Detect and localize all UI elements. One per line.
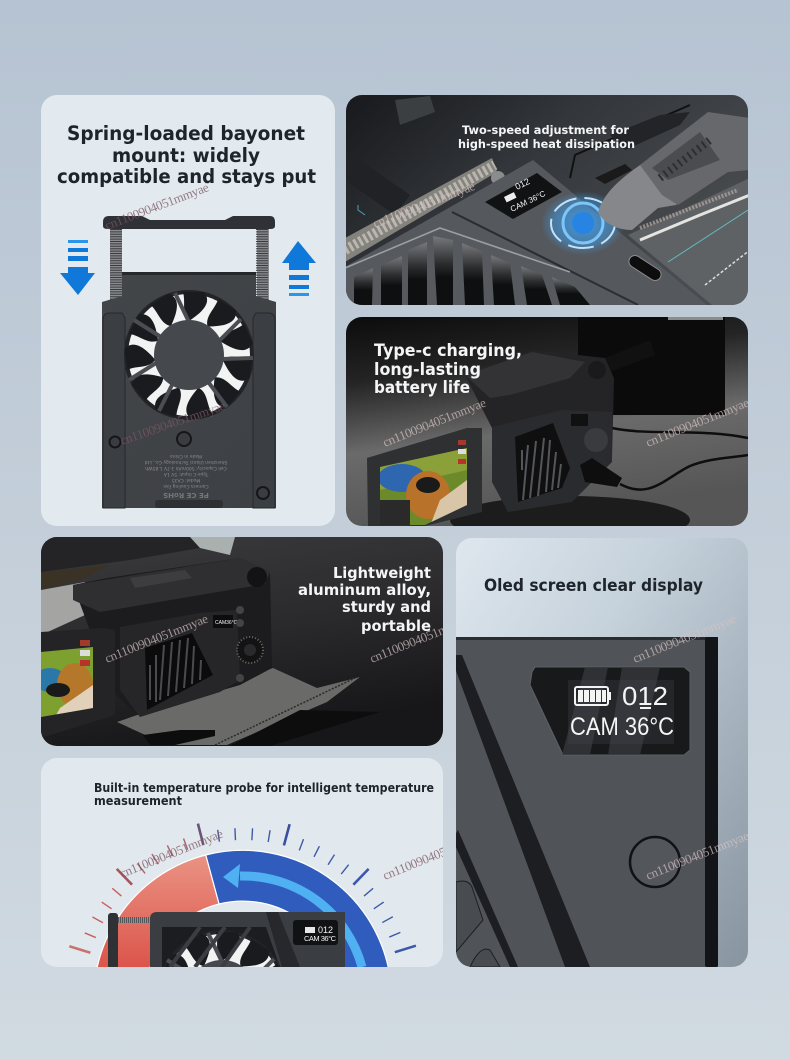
icon: up arrow: [282, 241, 316, 296]
caption: lightweight aluminum: sturdy and: [342, 598, 431, 616]
OLED display: [530, 667, 690, 755]
dark floor shadow: [450, 496, 690, 526]
USB-C port: [628, 255, 662, 281]
heading: OLED: Oled screen clear display: [484, 576, 703, 596]
heading: spring-loaded mount: compatible and stays put: [57, 165, 316, 188]
device close-up: [455, 637, 718, 967]
rating label, upside down: Type-C Input: 5V 1A: [163, 471, 209, 477]
charger box: [578, 315, 725, 415]
caption: lightweight aluminum: Lightweight: [333, 564, 432, 582]
finger: [598, 112, 750, 230]
watermark: cn1100904051mmyae: [103, 611, 210, 666]
rating label, upside down: Camera Cooling Fan: [163, 483, 209, 489]
heading: spring-loaded mount: [57, 122, 316, 188]
hot-shoe accessory: [143, 730, 215, 745]
heading: temperature probe: measurement: [94, 794, 182, 808]
panel: OLED screen: [455, 538, 751, 967]
panel: two-speed adjustment: [345, 95, 750, 305]
top clamp bar: [103, 216, 275, 229]
rating label, upside down: Made in China: [170, 453, 202, 459]
camera body: [465, 350, 614, 458]
camera dial: [236, 606, 263, 682]
heading: temperature probe: [94, 781, 434, 808]
spring rods: [110, 229, 269, 300]
watermark: cn1100904051mmyae: [381, 828, 488, 883]
caption: lightweight aluminum: portable: [361, 617, 431, 635]
caption: lightweight aluminum: [298, 564, 432, 635]
vent slots: [354, 236, 590, 305]
rating label, upside down: Cell Capacity: 500mAh 3.7V 1.85Wh: [145, 465, 227, 471]
watermark: cn1100904051mmyae: [644, 395, 751, 450]
gauge ring: blue segment: [206, 850, 392, 999]
panel: lightweight aluminum alloy: [34, 537, 475, 746]
rating label, upside down: PE CE RoHS: [163, 491, 209, 499]
watermark: cn1100904051mmyae: [381, 395, 488, 450]
heading: spring-loaded mount: mount: widely: [112, 144, 260, 167]
screws: [110, 432, 269, 499]
cooler attached: CAM36°C: [215, 620, 238, 626]
caption: two-speed adjustment: high-speed heat dissipation: [458, 137, 635, 151]
watermark: cn1100904051mmyae: [368, 611, 475, 666]
heading: temperature probe: Built-in temperature probe for intelligent temperature: [94, 781, 434, 795]
watermark: cn1100904051mmyae: [118, 826, 225, 881]
charging cables: [612, 428, 748, 490]
OLED display: [485, 173, 562, 219]
circuit board left: [345, 96, 505, 262]
panel: Type-C charging: [346, 315, 751, 544]
flip screen: [34, 628, 115, 738]
flip screen: [367, 428, 482, 530]
cooler device: [108, 912, 345, 1060]
gauge ring: red segment: [94, 855, 219, 999]
watermark: cn1100904051mmyae: [631, 611, 738, 666]
dotted chip strip: [640, 190, 738, 228]
cooler body: [345, 160, 707, 305]
OLED display: CAM 36°C: [570, 713, 674, 741]
rating label, upside down: [145, 453, 227, 499]
circuit board right: [570, 105, 750, 305]
watermark: cn1100904051mmyae: [103, 179, 211, 233]
touch glow button: [541, 191, 625, 255]
caption: two-speed adjustment: Two-speed adjustment for: [462, 123, 629, 137]
fan mount device: [102, 216, 276, 508]
cooler attached: [492, 410, 612, 512]
body plate: [102, 272, 276, 508]
cooler device: CAM 36°C: [304, 934, 337, 943]
OLED display: 012: [513, 176, 531, 192]
side rails: [103, 313, 125, 508]
cooler device: 012: [318, 925, 333, 935]
gauge ticks: [69, 824, 416, 953]
rating label, upside down: Shenzhen Ulanzi Technology Co., Ltd: [145, 459, 227, 465]
icon: down arrow: [60, 240, 95, 295]
caption: lightweight aluminum: aluminum alloy,: [298, 581, 431, 599]
caption: Type-C charging: Type-c charging,: [374, 341, 522, 361]
OLED display: CAM 36°C: [509, 189, 547, 214]
blue rotation arrow: [223, 864, 362, 967]
heading: spring-loaded mount: Spring-loaded bayonet: [67, 122, 305, 145]
watermark: cn1100904051mmyae: [371, 178, 477, 231]
watermark: cn1100904051mmyae: [644, 828, 751, 883]
plug: [580, 458, 622, 487]
camera bag: [41, 537, 235, 635]
camera body: [73, 558, 272, 715]
caption: Type-C charging: [374, 341, 522, 398]
panel: temperature probe: [41, 758, 488, 1060]
caption: Type-C charging: long-lasting: [374, 360, 481, 380]
OLED display: 012: [622, 681, 668, 711]
fan: [124, 290, 254, 421]
caption: two-speed adjustment: [458, 123, 635, 151]
felt pouch: [117, 668, 360, 745]
panel: spring-loaded bayonet mount: [41, 95, 335, 526]
bottom tab: [155, 500, 223, 508]
cooler attached: [120, 610, 240, 717]
watermark: cn1100904051mmyae: [118, 398, 227, 448]
caption: Type-C charging: battery life: [374, 378, 470, 398]
rating label, upside down: Model: CA35: [172, 477, 200, 483]
